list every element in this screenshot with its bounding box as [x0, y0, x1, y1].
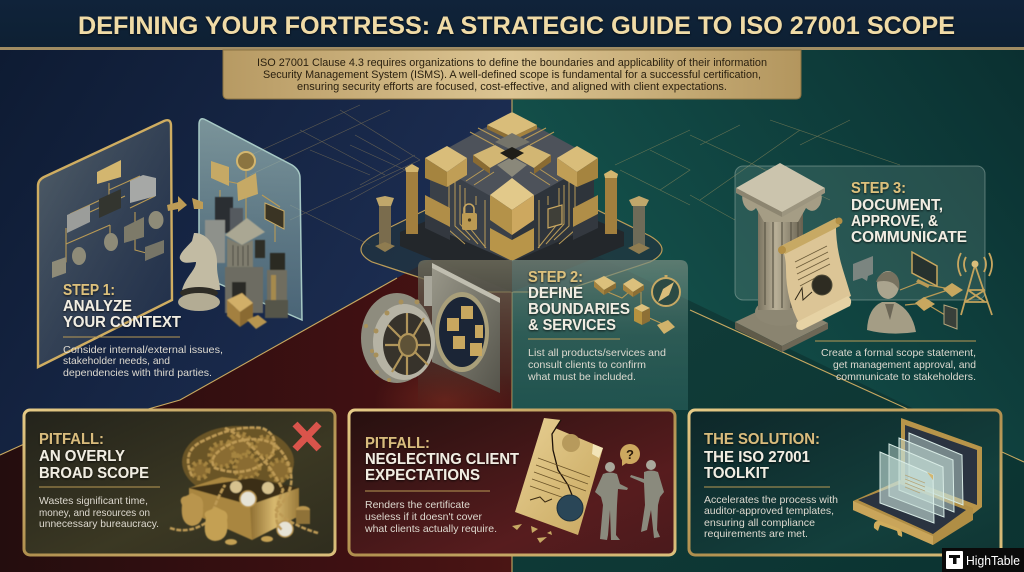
heading [39, 431, 149, 482]
icon: monitor [912, 252, 937, 288]
cube body [425, 112, 598, 262]
bank vault [361, 263, 500, 393]
illustration: chained chest, gears, money [170, 426, 318, 545]
illustration: torn certificate [512, 418, 603, 543]
logo mark [946, 551, 963, 569]
icon: question bubble [620, 444, 640, 466]
step 2 body: what must be included. [527, 371, 636, 383]
icon: speech bubble [853, 256, 873, 281]
heading: THE ISO 27001 [704, 449, 810, 466]
step 3 body: Create a formal scope statement, [821, 347, 976, 359]
step 3 heading: STEP 3: [851, 180, 906, 197]
heading: AN OVERLY [39, 448, 125, 465]
vault door [361, 293, 435, 383]
gold block stack [227, 293, 267, 329]
step 2 body: consult clients to confirm [528, 359, 646, 371]
scroll with seal and signature [778, 218, 851, 330]
panel: pitfall neglecting client expectations [349, 410, 675, 555]
icon: question bubble: ? [626, 447, 634, 462]
body [364, 499, 497, 535]
body: requirements are met. [704, 528, 808, 540]
step 1 heading: YOUR CONTEXT [63, 314, 181, 331]
icon: red cross [295, 424, 319, 449]
step 1 heading [63, 282, 181, 331]
man on the left [595, 462, 628, 540]
panel: step 1 analyze your context [38, 119, 302, 379]
step 1 body: stakeholder needs, and [63, 355, 170, 367]
HighTable logo: HighTable [966, 553, 1020, 568]
heading: NEGLECTING CLIENT [365, 451, 519, 468]
stone column [735, 163, 828, 352]
step 2 heading: STEP 2: [528, 269, 583, 286]
body: Renders the certificate [365, 499, 470, 511]
man on the right [630, 460, 664, 538]
heading [704, 431, 820, 482]
miniature fortress [205, 197, 288, 329]
body [704, 494, 838, 540]
title: DEFINING YOUR FORTRESS: A STRATEGIC GUIDE TO ISO 27001 SCOPE [78, 12, 955, 40]
step 1 heading: ANALYZE [63, 298, 132, 315]
icon: stakeholder bust [867, 271, 916, 334]
body: Wastes significant time, [39, 495, 148, 507]
step 2 heading [528, 269, 630, 334]
icon: service network [594, 275, 680, 334]
icon: padlock [462, 204, 477, 230]
heading: PITFALL: [365, 435, 430, 452]
icon: chess knight [178, 233, 220, 311]
glass board: strategy diagram [199, 119, 302, 320]
glass panel [735, 166, 985, 300]
panel: pitfall overly broad scope [24, 410, 335, 555]
intro text: Security Management System (ISMS). A well-defined scope is fundamental for a successful certification, [263, 69, 761, 81]
body: money, and resources on [39, 507, 150, 519]
illustration: gold briefcase [853, 418, 982, 545]
icon: chip [548, 205, 562, 228]
header band [0, 0, 1024, 50]
step 3 heading: APPROVE, & [851, 213, 938, 230]
step 2 body [527, 347, 666, 383]
panel: step 3 document approve communicate [735, 163, 992, 383]
step 2 heading: & SERVICES [528, 317, 616, 334]
step 1 body [63, 344, 223, 379]
body: what clients actually require. [364, 523, 497, 535]
glass panel [418, 260, 688, 410]
illustration: two businessmen [595, 460, 664, 540]
step 3 body: get management approval, and [833, 359, 976, 371]
intro plaque [223, 50, 801, 99]
columns [375, 164, 650, 254]
step 3 body: communicate to stakeholders. [836, 371, 976, 383]
body: unnecessary bureaucracy. [39, 518, 159, 530]
central cube fortress [361, 112, 662, 292]
step 1 body: dependencies with third parties. [63, 367, 212, 379]
heading: TOOLKIT [704, 465, 769, 482]
gold blocks [425, 112, 598, 261]
arrows between boards [167, 196, 203, 212]
heading: EXPECTATIONS [365, 467, 480, 484]
icon: signal tower [958, 253, 992, 315]
body: useless if it doesn't cover [365, 511, 482, 523]
icon: compass [652, 275, 680, 306]
HighTable logo [942, 548, 1024, 572]
glass board: org chart [38, 120, 172, 367]
intro text: ensuring security efforts are focused, cost-effective, and aligned with client expectations. [297, 81, 727, 93]
heading: THE SOLUTION: [704, 431, 820, 448]
blueprint grid left [240, 105, 420, 245]
step 3 heading [851, 180, 967, 246]
step 2 heading: BOUNDARIES [528, 301, 630, 318]
step 2 body: List all products/services and [528, 347, 666, 359]
heading: BROAD SCOPE [39, 465, 149, 482]
step 3 heading: COMMUNICATE [851, 229, 967, 246]
panel: step 2 define boundaries and services [361, 260, 688, 410]
step 3 body [821, 347, 976, 383]
body: Accelerates the process with [704, 494, 838, 506]
heading: PITFALL: [39, 431, 104, 448]
step 3 heading: DOCUMENT, [851, 197, 943, 214]
intro text [257, 57, 767, 93]
step 1 heading: STEP 1: [63, 282, 115, 299]
icon: phone [944, 305, 957, 329]
glass templates [880, 433, 963, 523]
connection network [900, 283, 963, 318]
step 1 body: Consider internal/external issues, [63, 344, 223, 356]
panel: the solution iso 27001 toolkit [689, 410, 1001, 555]
platform [361, 168, 662, 292]
body: ensuring all compliance [704, 517, 815, 529]
body: auditor-approved templates, [704, 505, 834, 517]
intro text: ISO 27001 Clause 4.3 requires organizations to define the boundaries and applicability of their information [257, 57, 767, 69]
blueprint grid right [615, 120, 900, 220]
body [39, 495, 159, 530]
heading [365, 435, 519, 484]
step 2 heading: DEFINE [528, 285, 583, 302]
